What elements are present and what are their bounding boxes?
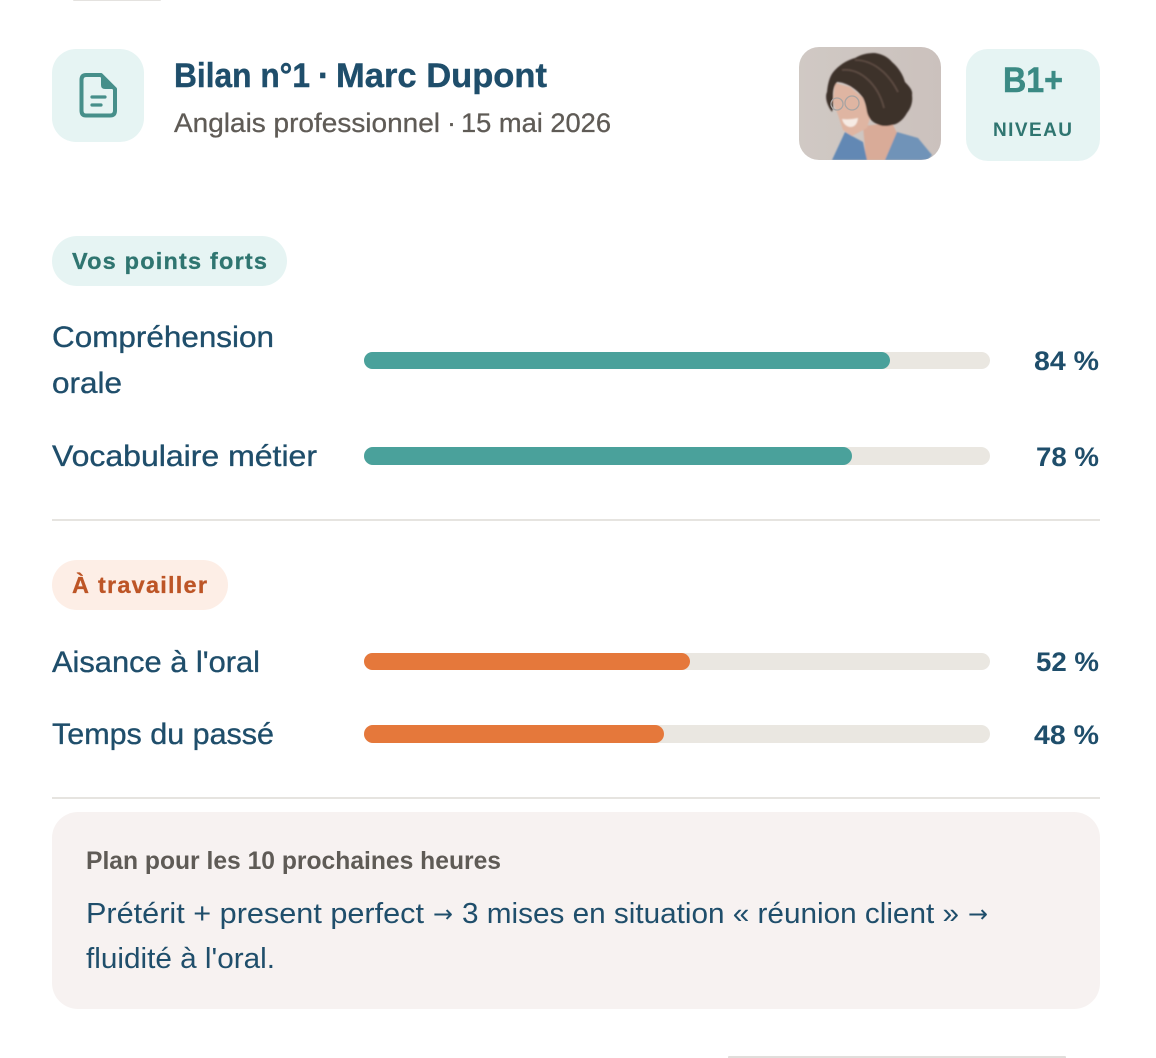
photo: smiling woman with glasses [799, 47, 941, 160]
pill: Vos points forts [52, 236, 287, 286]
plan heading: Plan pour les 10 prochaines heures [86, 847, 501, 875]
row: Vocabulaire métier 78 %: 78 % [1036, 442, 1099, 472]
row: Aisance à l'oral 52 %: 52 % [1036, 647, 1099, 677]
section: strengths [52, 236, 1099, 473]
subtitle: 15 mai 2026 [461, 108, 611, 138]
plan text [86, 898, 988, 975]
level badge [966, 49, 1100, 161]
level badge: NIVEAU [993, 120, 1072, 141]
pill: Vos points forts: Vos points forts [72, 248, 267, 274]
row: Temps du passé 48 %: 48 % [1034, 720, 1099, 750]
row: Temps du passé 48 % [52, 718, 1099, 751]
title: · [318, 57, 329, 95]
level badge: B1+ [1003, 61, 1063, 100]
pill: À travailler [52, 560, 228, 610]
row: Compréhension orale 84 %: Compréhension [52, 321, 274, 354]
plan text: Prétérit + present perfect [86, 898, 424, 930]
section: to work on [52, 560, 1099, 751]
row: Temps du passé 48 %: Temps du passé [52, 718, 274, 751]
plan text: → [433, 900, 453, 928]
title: Bilan n°1 [174, 57, 310, 95]
row: Aisance à l'oral 52 % [52, 646, 1099, 679]
pill: À travailler: À travailler [72, 571, 207, 598]
subtitle: Anglais professionnel [174, 108, 440, 138]
row: Compréhension orale 84 %: orale [52, 367, 122, 400]
title [174, 57, 547, 95]
row: Compréhension orale 84 % [52, 321, 1099, 400]
title: Marc Dupont [336, 57, 547, 95]
row: Vocabulaire métier 78 % [52, 440, 1099, 473]
icon: document [52, 49, 144, 142]
row: Vocabulaire métier 78 %: Vocabulaire métier [52, 440, 317, 473]
header [52, 47, 1100, 161]
subtitle: · [447, 108, 456, 138]
plan text: fluidité à l'oral. [86, 943, 275, 975]
subtitle [174, 108, 611, 138]
plan text: 3 mises en situation « réunion client » [462, 898, 959, 930]
row: Aisance à l'oral 52 %: Aisance à l'oral [52, 646, 260, 679]
plan text: → [968, 900, 988, 928]
panel: plan for next 10 hours [52, 812, 1100, 1009]
row: Compréhension orale 84 %: 84 % [1034, 346, 1099, 376]
